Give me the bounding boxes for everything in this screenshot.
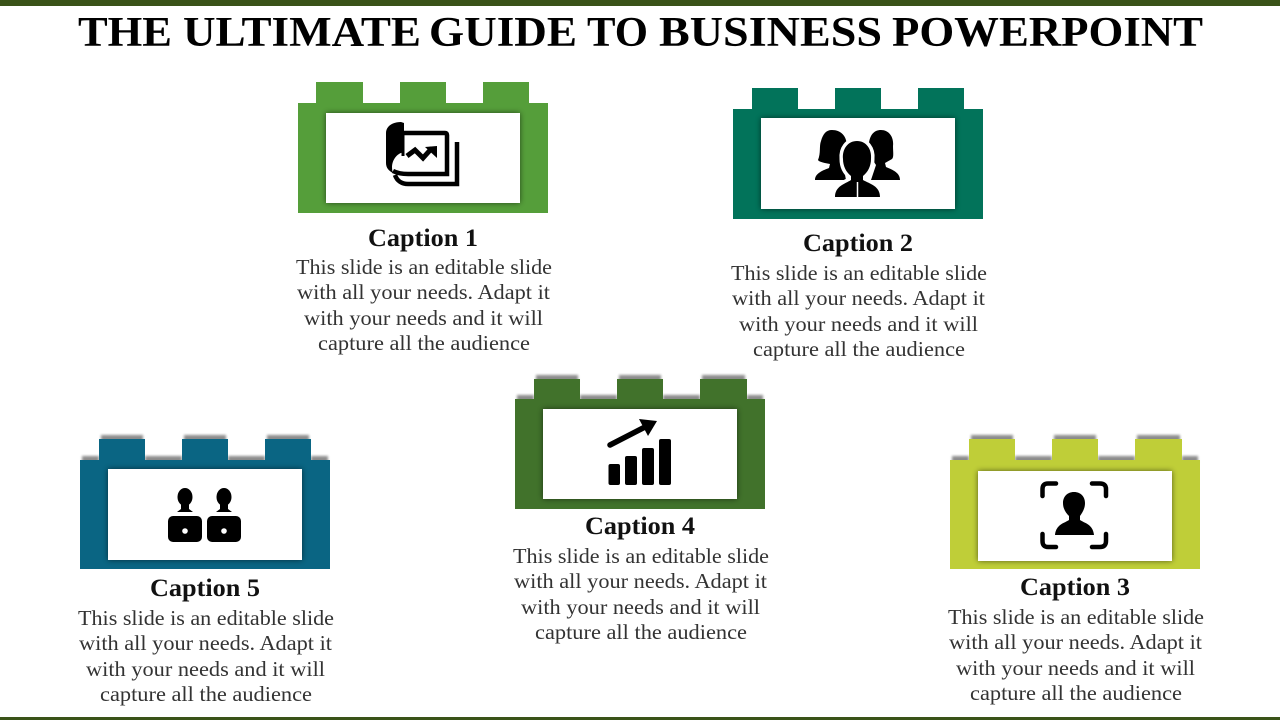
brick 1 [298,82,548,213]
panel: caption 5 [78,435,334,706]
top bar [0,0,1280,6]
caption 4 text: Caption 4 [585,513,696,540]
title: THE [78,9,172,56]
panel: caption 2 [731,88,987,361]
panel: caption 1 [296,82,552,355]
caption 5 text: capture all the audience [100,682,312,706]
brick 3 [950,435,1200,569]
caption 1 text: with all your needs. Adapt it [297,280,550,304]
caption 2 text: capture all the audience [753,337,965,361]
caption 1 text [296,225,552,355]
caption 4 text: with your needs and it will [521,595,760,619]
caption 1 text: with your needs and it will [304,306,543,330]
caption 3 text [948,574,1204,705]
caption 2 text: with all your needs. Adapt it [732,286,985,310]
title: GUIDE [429,9,577,56]
caption 4 text: capture all the audience [535,620,747,644]
brick 5 [80,435,330,569]
caption 3 text: with all your needs. Adapt it [949,630,1202,654]
icon: face scan [1042,484,1106,547]
panel: caption 3 [948,435,1204,705]
caption 1 text: This slide is an editable slide [296,255,552,279]
title: BUSINESS [659,9,882,56]
title: POWERPOINT [892,9,1203,56]
bottom bar [0,717,1280,720]
brick 2 [733,88,983,219]
caption 1 text: Caption 1 [368,225,478,252]
caption 2 text: Caption 2 [803,230,913,257]
icon: two people at laptops [168,488,241,542]
caption 5 text: with all your needs. Adapt it [79,631,332,655]
icon: chart cards [386,122,457,184]
caption 2 text [731,230,987,361]
caption 5 text: with your needs and it will [86,657,325,681]
icon: rising bar chart [608,419,671,485]
caption 3 text: with your needs and it will [956,656,1195,680]
caption 3 text: Caption 3 [1020,574,1130,601]
caption 5 text: Caption 5 [150,575,260,602]
caption 2 text: with your needs and it will [739,312,978,336]
caption 3 text: capture all the audience [970,681,1182,705]
caption 2 text: This slide is an editable slide [731,261,987,285]
brick 4 [515,375,765,509]
caption 3 text: This slide is an editable slide [948,605,1204,629]
caption 4 text: This slide is an editable slide [513,544,769,568]
caption 5 text: This slide is an editable slide [78,606,334,630]
icon: three people [815,130,900,197]
caption 4 text [513,513,769,644]
title: ULTIMATE [183,9,421,56]
title: TO [587,9,648,56]
caption 5 text [78,575,334,706]
title [78,9,1203,56]
caption 1 text: capture all the audience [318,331,530,355]
caption 4 text: with all your needs. Adapt it [514,569,767,593]
panel: caption 4 [513,375,769,644]
